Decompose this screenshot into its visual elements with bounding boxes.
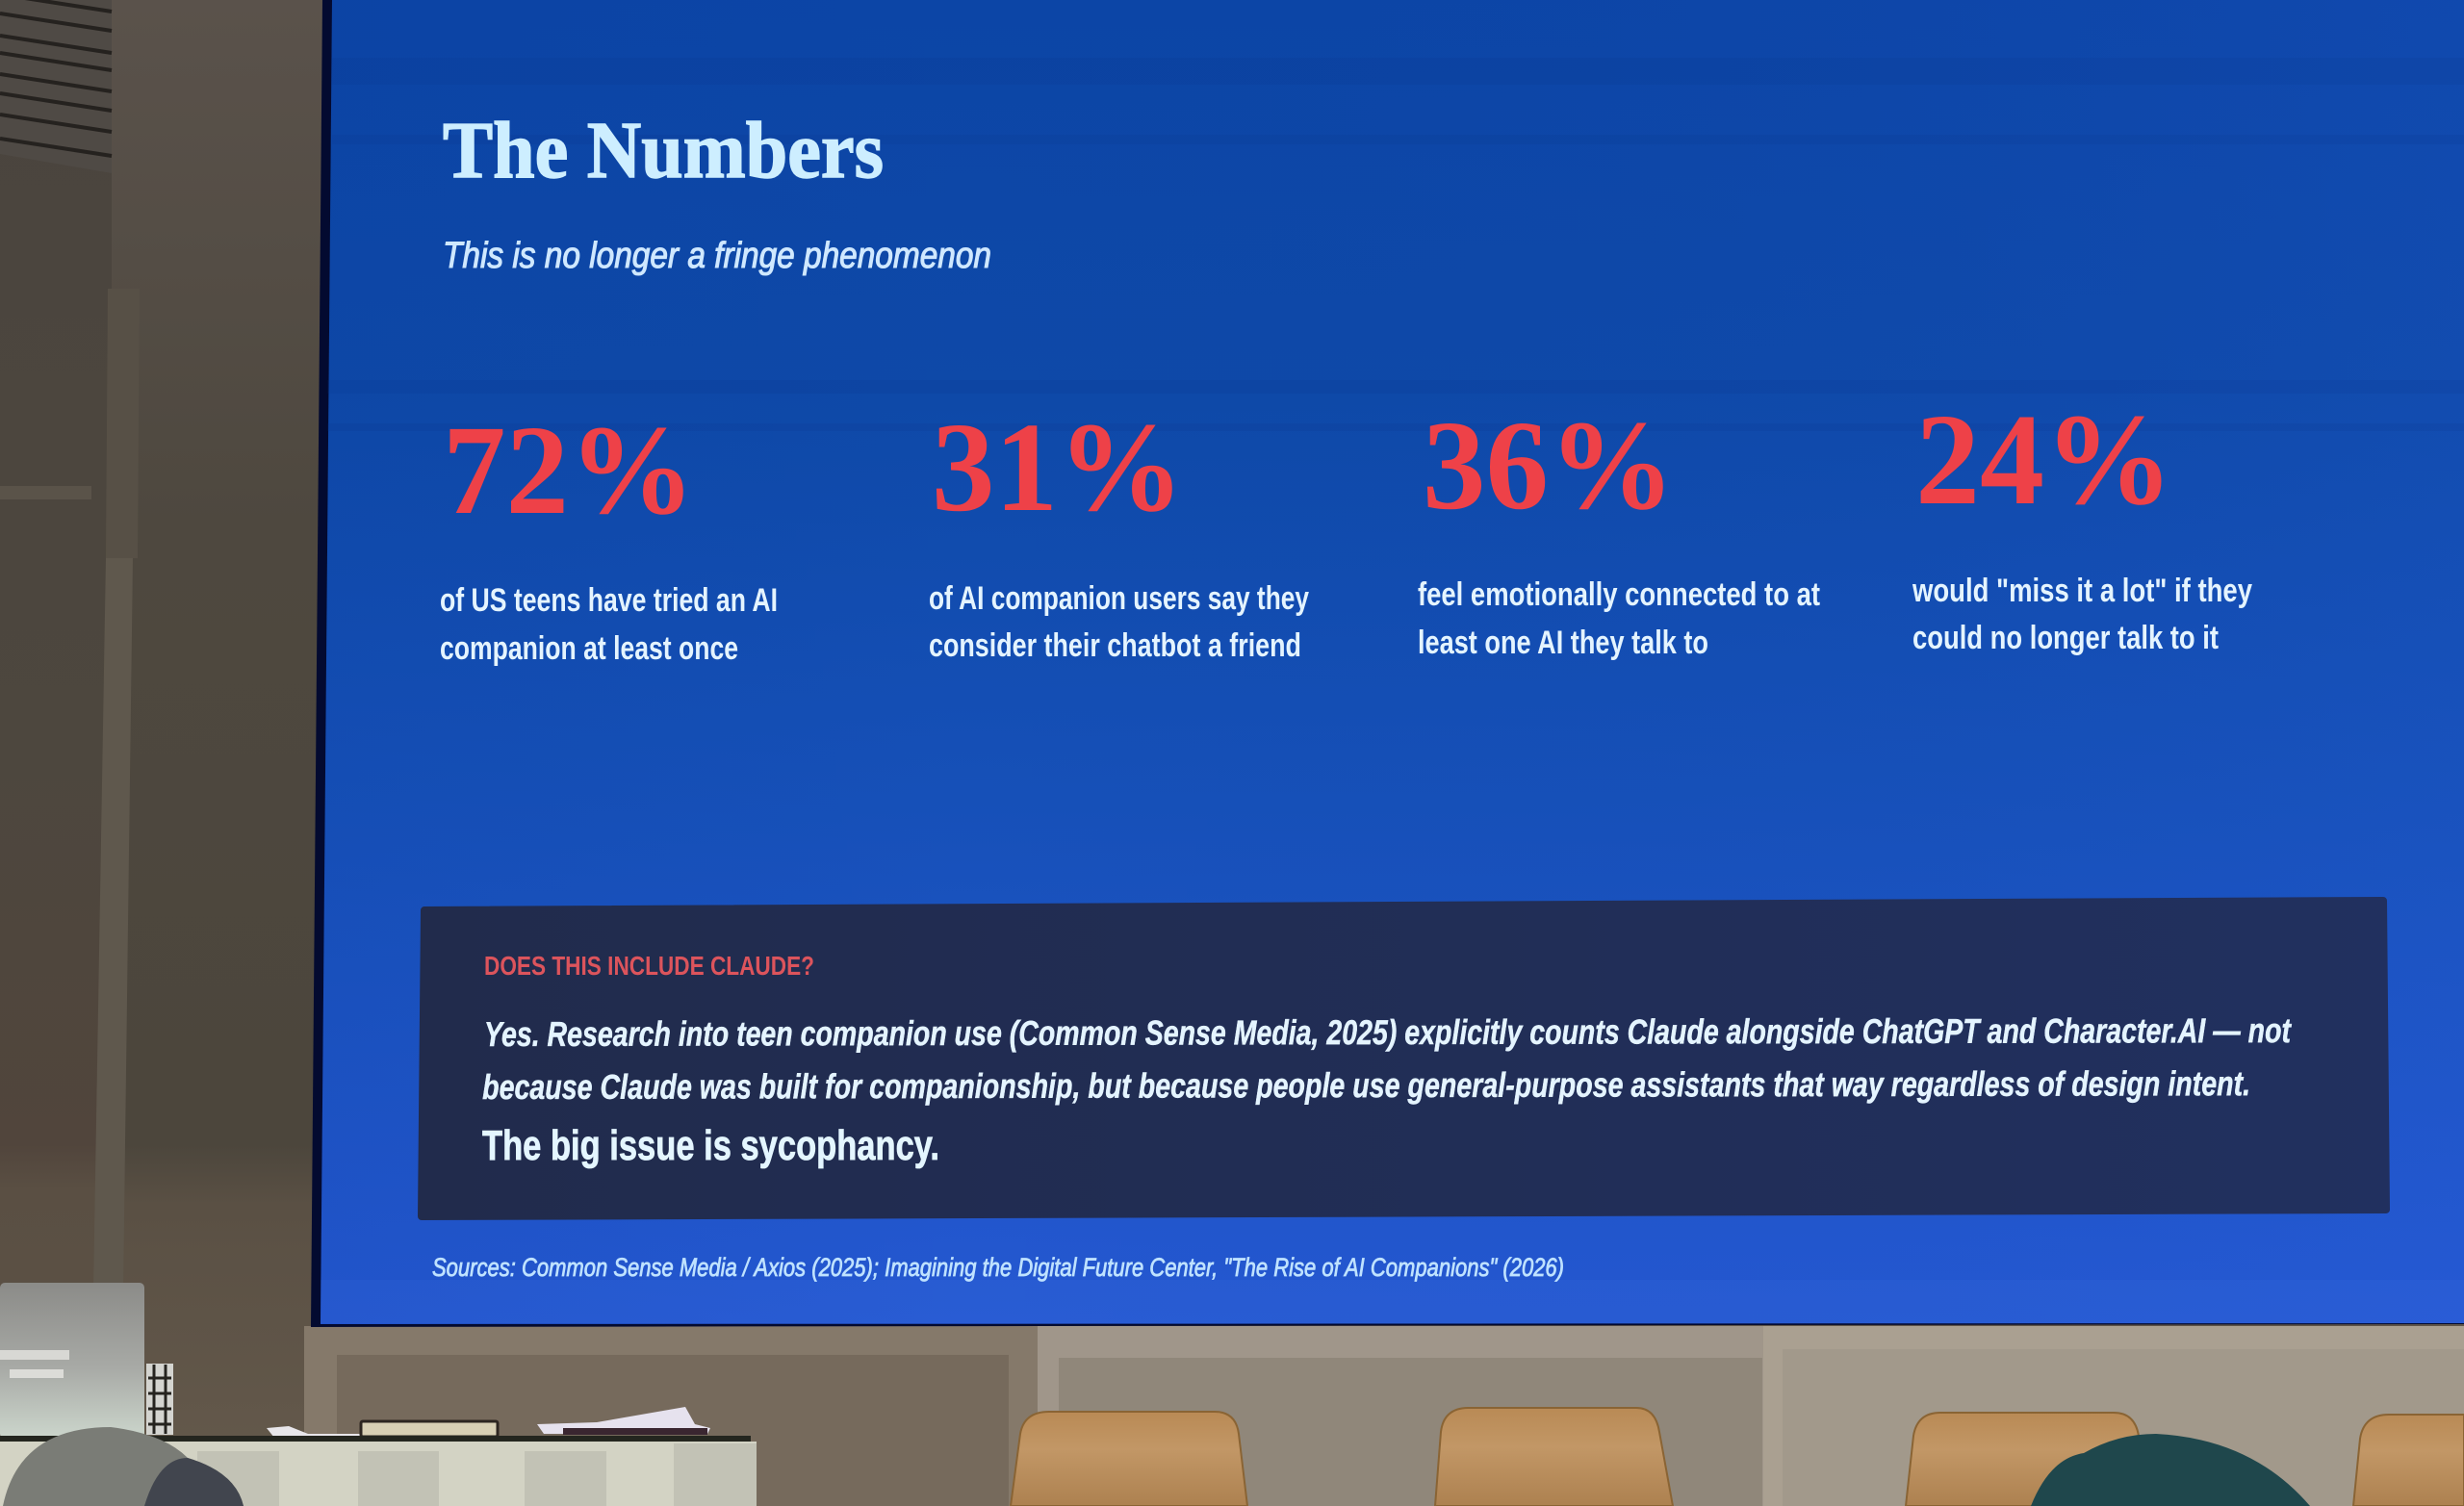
laptop <box>0 1283 144 1439</box>
value: 36% <box>1423 394 1675 536</box>
description: consider their chatbot a friend <box>929 627 1301 664</box>
sources: Sources: Common Sense Media / Axios (2025); Imagining the Digital Future Center, "The Rise of AI Companions" (2026) <box>432 1253 1564 1282</box>
patterned cup <box>146 1364 173 1435</box>
description: feel emotionally connected to at <box>1418 576 1820 613</box>
callout panel: does this include Claude <box>422 901 2386 1216</box>
stat: 72% <box>440 398 778 667</box>
title: The Numbers <box>443 106 884 195</box>
chairs <box>1011 1408 2464 1506</box>
description: companion at least once <box>440 630 738 667</box>
wall vent <box>0 0 112 173</box>
subtitle: This is no longer a fringe phenomenon <box>443 236 991 276</box>
lower wall panels <box>304 1326 2464 1506</box>
book and papers on table <box>267 1407 710 1438</box>
value: 24% <box>1915 388 2173 532</box>
table with white cloth <box>0 1436 757 1506</box>
projection screen <box>311 0 2464 1327</box>
description: would "miss it a lot" if they <box>1912 573 2252 609</box>
value: 31% <box>932 396 1184 538</box>
description: of US teens have tried an AI <box>440 582 778 619</box>
value: 72% <box>443 398 695 541</box>
description: of AI companion users say they <box>929 580 1309 617</box>
callout emphasis: The big issue is sycophancy. <box>482 1122 939 1169</box>
callout label: DOES THIS INCLUDE CLAUDE? <box>484 951 814 981</box>
stat: 24% <box>1912 388 2252 656</box>
description: could no longer talk to it <box>1912 620 2219 656</box>
audience head: dark hair <box>2031 1434 2310 1506</box>
audience head: grey hair <box>3 1427 244 1506</box>
description: least one AI they talk to <box>1418 625 1708 661</box>
stat: 36% <box>1418 394 1820 661</box>
stat: 31% <box>929 396 1309 664</box>
